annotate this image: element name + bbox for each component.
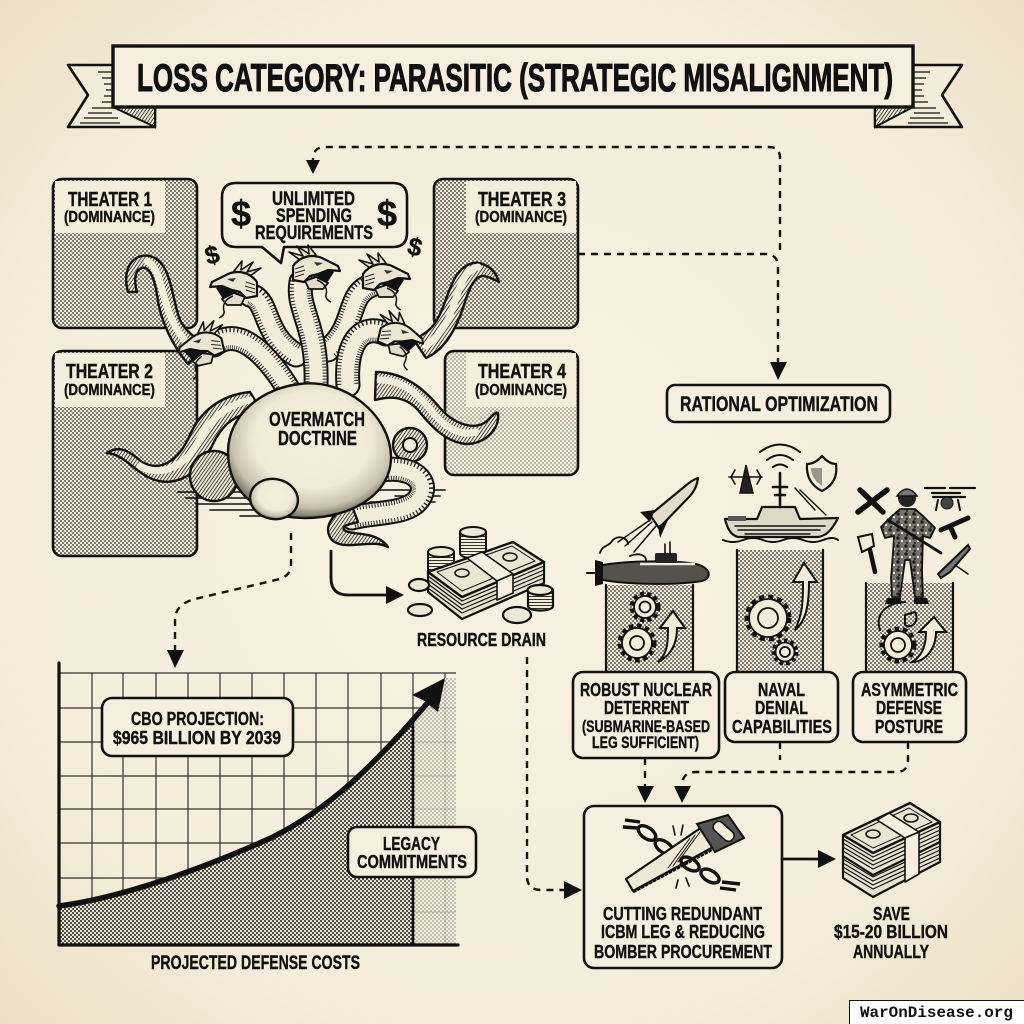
arrow: naval and asymmetric to cutting box — [674, 742, 908, 803]
grid — [59, 673, 456, 945]
chart label: PROJECTED DEFENSE COSTS — [151, 953, 360, 974]
icon: floating dollar right: $ — [404, 232, 425, 263]
saw handle — [697, 815, 744, 852]
icon: floating dollar left: $ — [202, 240, 223, 271]
box: rational optimization — [667, 385, 890, 422]
arrow: nuclear to cutting box — [637, 758, 654, 803]
box: cutting redundant leg: BOMBER PROCUREMENT — [594, 941, 773, 962]
label box: asymmetric defense posture: POSTURE — [875, 716, 943, 737]
chain upper — [623, 820, 675, 857]
coil: right with tail — [328, 469, 423, 547]
arrow: dashed feedback to spending requirements — [306, 147, 780, 250]
arrow: theater 3 to rational optimization — [578, 254, 787, 380]
head: center — [289, 245, 340, 302]
panel: theater 1: (DOMINANCE) — [64, 209, 155, 226]
column: naval denial — [737, 550, 823, 672]
coil: bottom lump — [247, 475, 301, 523]
label box: asymmetric defense posture: DEFENSE — [876, 697, 942, 718]
callout: CBO projection: $965 BILLION BY 2039 — [113, 727, 281, 748]
icon: saw cutting chain — [623, 815, 744, 892]
panel: theater 2: THEATER 2 — [66, 361, 153, 383]
watermark — [850, 1000, 1024, 1024]
label box: asymmetric defense posture — [853, 672, 966, 742]
label box: robust nuclear deterrent: (SUBMARINE-BASED — [582, 717, 710, 736]
tentacle: lower right — [375, 372, 498, 444]
label box: asymmetric defense posture: ASYMMETRIC — [861, 679, 958, 700]
callout: legacy commitments: LEGACY — [383, 833, 440, 854]
chart: projected defense costs — [59, 663, 476, 974]
label box: naval denial capabilities: CAPABILITIES — [732, 716, 832, 737]
panel: theater 2 — [53, 351, 197, 556]
speech bubble: unlimited spending requirements: SPENDING — [276, 206, 352, 227]
illustration: hydra — [107, 245, 499, 547]
box: rational optimization: RATIONAL OPTIMIZATION — [680, 393, 878, 416]
label box: robust nuclear deterrent: DETERRENT — [604, 697, 690, 718]
icon: axe — [858, 534, 875, 572]
label box: naval denial capabilities: DENIAL — [755, 697, 808, 718]
speech bubble: unlimited spending requirements — [222, 183, 407, 263]
title banner — [68, 46, 962, 127]
icon: wireless signal — [760, 444, 800, 467]
icon: cash and coins — [408, 527, 553, 623]
label box: robust nuclear deterrent: LEG SUFFICIENT) — [592, 733, 699, 752]
icon: warship — [723, 473, 838, 542]
icon: cash stack — [843, 803, 940, 897]
loose coins — [408, 579, 553, 623]
icon: soldier — [881, 489, 941, 604]
label: overmatch doctrine: DOCTRINE — [278, 428, 357, 450]
callout: CBO projection: CBO PROJECTION: — [131, 708, 264, 729]
head: mid right — [369, 308, 429, 372]
icon: rifle — [938, 545, 970, 578]
icon: gears with arrow — [620, 594, 685, 662]
text: savings: ANNUALLY — [853, 941, 929, 962]
text: CUTTING REDUNDANT — [603, 903, 763, 924]
panel: theater 1 — [53, 179, 197, 328]
ground shading — [178, 490, 445, 516]
panel: theater 1: THEATER 1 — [68, 189, 152, 211]
neck: mid right — [348, 331, 386, 385]
head: mid left — [174, 318, 232, 381]
speech bubble: unlimited spending requirements: UNLIMITED — [272, 189, 355, 210]
icon: quadcopter drone — [925, 488, 975, 510]
panel: theater 3: (DOMINANCE) — [475, 209, 567, 226]
callout: legacy commitments — [348, 827, 476, 877]
speech bubble: unlimited spending requirements: REQUIREMENTS — [255, 223, 373, 244]
head: upper left — [210, 261, 261, 318]
panel: theater 3: THEATER 3 — [478, 189, 566, 211]
light stippled legacy band — [413, 678, 456, 945]
speech bubble: unlimited spending requirements: $ — [231, 193, 251, 234]
icon: submarine — [587, 542, 709, 586]
callout: legacy commitments: COMMITMENTS — [357, 851, 467, 872]
neck: upper left — [250, 295, 296, 355]
column: asymmetric defense — [866, 583, 953, 672]
ribbon tail left — [68, 65, 155, 127]
head: upper right — [359, 253, 410, 310]
text: savings — [834, 903, 948, 962]
tentacle: upper left — [126, 256, 206, 364]
neck: upper right — [328, 285, 372, 350]
ribbon tail right — [875, 65, 962, 127]
callout: CBO projection — [102, 698, 293, 756]
text: savings: $15-20 BILLION — [834, 921, 948, 942]
box: cutting redundant leg — [584, 806, 782, 968]
panel: theater 4: (DOMINANCE) — [475, 382, 567, 399]
neck: center — [300, 282, 316, 385]
icon: radio tower — [729, 465, 762, 493]
coin stack left — [428, 547, 454, 577]
saw blade — [626, 825, 717, 891]
panel: theater 2: (DOMINANCE) — [64, 382, 155, 399]
stippled area under curve — [59, 722, 413, 945]
panel: theater 4 — [445, 351, 578, 475]
arrow: hydra to resource drain — [331, 551, 404, 604]
neck: mid left — [214, 339, 290, 392]
icon: hand tool — [941, 518, 968, 537]
hydra body — [228, 383, 391, 518]
cash bundle — [428, 542, 544, 619]
icon: gears with arrow — [747, 563, 817, 663]
axes — [59, 663, 458, 945]
label box: robust nuclear deterrent: ROBUST NUCLEAR — [580, 679, 712, 700]
coil: right small — [393, 428, 427, 462]
label: overmatch doctrine — [269, 409, 365, 450]
speech bubble: unlimited spending requirements: $ — [377, 193, 397, 234]
icon: shield — [807, 456, 836, 491]
label box: naval denial capabilities — [725, 672, 838, 742]
legacy divider — [412, 724, 414, 945]
icon: missile launch — [600, 478, 698, 560]
coil: left — [190, 451, 238, 501]
label box: naval denial capabilities: NAVAL — [758, 679, 805, 700]
growth curve arrow — [59, 678, 445, 906]
icon: drone propeller — [858, 490, 887, 512]
arrow: dashed hydra to chart — [167, 533, 291, 668]
label: overmatch doctrine: OVERMATCH — [269, 409, 365, 431]
box: cutting redundant leg: ICBM LEG & REDUCING — [601, 921, 765, 942]
coin stack back — [460, 527, 486, 558]
tentacle: lower left — [107, 392, 262, 482]
column: nuclear deterrent — [606, 585, 693, 672]
arrow: resource drain to cutting box — [527, 657, 582, 899]
text: savings: SAVE — [873, 903, 910, 924]
label: resource drain: RESOURCE DRAIN — [417, 630, 546, 650]
icon: gear with arrow — [879, 602, 946, 662]
arrow: cutting to savings — [782, 850, 836, 868]
panel: theater 4: THEATER 4 — [478, 361, 567, 383]
chain lower — [679, 854, 740, 890]
tentacle: upper right — [414, 263, 499, 358]
watermark: WarOnDisease.org — [860, 1004, 1013, 1022]
panel: theater 3 — [434, 179, 578, 328]
label box: robust nuclear deterrent — [573, 672, 719, 758]
